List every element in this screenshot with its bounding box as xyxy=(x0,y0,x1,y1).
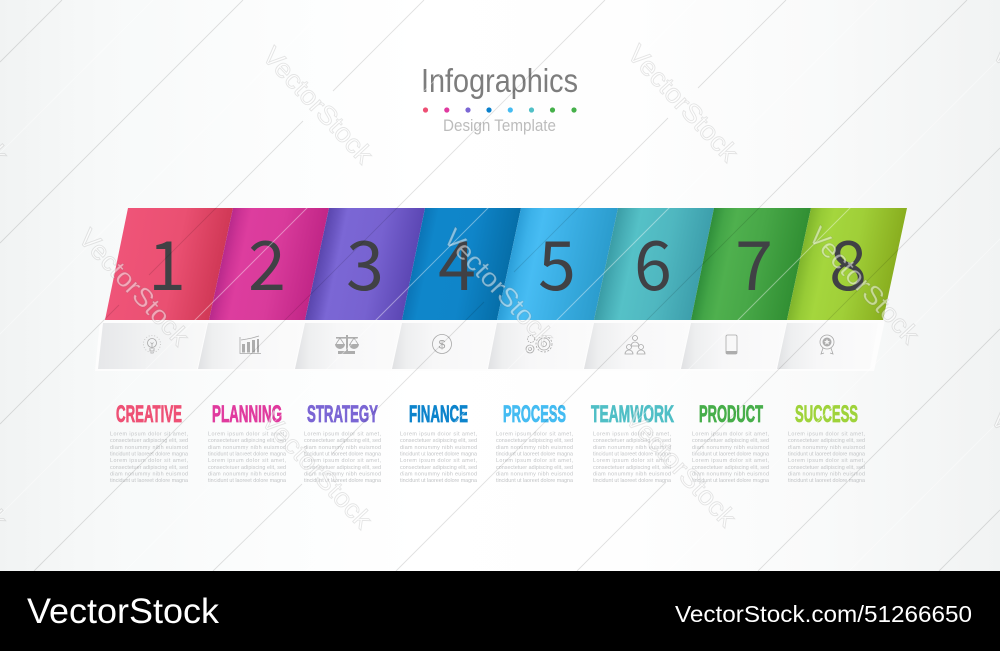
body text: Lorem ipsum dolor sit amet, xyxy=(208,458,286,464)
body text: tincidunt ut laoreet dolore magna xyxy=(593,452,671,458)
band numbers: 8 xyxy=(829,211,867,310)
band 2 xyxy=(209,208,329,320)
coloured dots row xyxy=(423,107,577,113)
icon: light bulb xyxy=(144,336,160,353)
numbered colour bands xyxy=(105,208,907,320)
band numbers xyxy=(148,211,867,310)
watermarks: VectorStock xyxy=(73,223,196,352)
body text: diam nonummy nibh euismod xyxy=(400,445,477,451)
body text: tincidunt ut laoreet dolore magna xyxy=(304,452,381,458)
body text: consectetuer adipiscing elit, sed xyxy=(788,465,865,471)
body text: tincidunt ut laoreet dolore magna xyxy=(496,452,573,458)
body text: tincidunt ut laoreet dolore magna xyxy=(496,478,573,484)
band 5 xyxy=(497,208,618,320)
body text: consectetuer adipiscing elit, sed xyxy=(208,465,286,471)
body text: consectetuer adipiscing elit, sed xyxy=(304,465,381,471)
body text: tincidunt ut laoreet dolore magna xyxy=(208,452,286,458)
body text: Lorem ipsum dolor sit amet, xyxy=(593,458,672,464)
title: Infographics xyxy=(421,62,578,99)
body text: diam nonummy nibh euismod xyxy=(208,445,286,451)
icon: dollar coin: $ xyxy=(439,338,446,352)
tile 4 xyxy=(392,323,496,369)
body text: consectetuer adipiscing elit, sed xyxy=(496,438,573,444)
tile 8 xyxy=(777,323,878,369)
tile 3 xyxy=(295,323,401,369)
body text: Lorem ipsum dolor sit amet, xyxy=(110,432,188,438)
band numbers: 4 xyxy=(438,211,476,310)
subtitle: Design Template xyxy=(443,116,556,135)
body text: diam nonummy nibh euismod xyxy=(593,445,671,451)
watermarks xyxy=(0,39,1000,535)
body text: tincidunt ut laoreet dolore magna xyxy=(208,478,286,484)
icon: scales xyxy=(335,335,359,354)
column: strategy xyxy=(304,401,382,484)
body text: consectetuer adipiscing elit, sed xyxy=(593,465,671,471)
band numbers: 1 xyxy=(148,211,186,310)
body text xyxy=(110,432,188,484)
column: teamwork xyxy=(591,401,674,484)
icon: smartphone xyxy=(726,335,737,354)
tile 5 xyxy=(488,323,593,369)
band 6 xyxy=(594,208,714,320)
body text: tincidunt ut laoreet dolore magna xyxy=(304,478,381,484)
body text: Lorem ipsum dolor sit amet, xyxy=(208,432,286,438)
body text: consectetuer adipiscing elit, sed xyxy=(400,438,477,444)
body text: diam nonummy nibh euismod xyxy=(208,472,286,478)
band 3 xyxy=(305,208,425,320)
heading: PROCESS xyxy=(503,401,566,428)
icon: award badge xyxy=(820,335,834,354)
watermarks: VectorStock xyxy=(256,406,379,535)
icon tiles row xyxy=(95,320,885,371)
body text: tincidunt ut laoreet dolore magna xyxy=(788,478,865,484)
body text: diam nonummy nibh euismod xyxy=(692,445,769,451)
body text: diam nonummy nibh euismod xyxy=(110,445,188,451)
body text xyxy=(208,432,286,484)
body text: tincidunt ut laoreet dolore magna xyxy=(788,452,865,458)
body text: consectetuer adipiscing elit, sed xyxy=(692,465,769,471)
body text xyxy=(400,432,478,484)
heading: PLANNING xyxy=(212,401,282,428)
tile 2 xyxy=(198,323,304,369)
watermarks: VectorStock xyxy=(438,223,561,352)
body text: diam nonummy nibh euismod xyxy=(496,445,573,451)
band numbers: 7 xyxy=(735,211,773,310)
band numbers: 5 xyxy=(538,211,576,310)
body text xyxy=(304,432,382,484)
footer logo text: VectorStock xyxy=(27,592,220,631)
band 4 xyxy=(402,208,521,320)
column: planning xyxy=(208,401,286,484)
body text: consectetuer adipiscing elit, sed xyxy=(788,438,865,444)
body text: diam nonummy nibh euismod xyxy=(496,472,573,478)
band numbers: 2 xyxy=(248,211,286,310)
body text: diam nonummy nibh euismod xyxy=(692,472,769,478)
body text: consectetuer adipiscing elit, sed xyxy=(692,438,769,444)
body text: Lorem ipsum dolor sit amet, xyxy=(400,432,478,438)
heading: TEAMWORK xyxy=(591,401,674,428)
watermarks: VectorStock xyxy=(620,404,743,533)
band numbers: 3 xyxy=(346,211,384,310)
tile 6 xyxy=(584,323,690,369)
body text: Lorem ipsum dolor sit amet, xyxy=(110,458,188,464)
body text xyxy=(593,432,672,484)
body text: consectetuer adipiscing elit, sed xyxy=(110,438,188,444)
body text: Lorem ipsum dolor sit amet, xyxy=(692,458,770,464)
heading: SUCCESS xyxy=(795,401,858,428)
body text: Lorem ipsum dolor sit amet, xyxy=(788,432,866,438)
icon: dollar coin xyxy=(432,334,452,354)
body text xyxy=(692,432,770,484)
column: success xyxy=(788,401,866,484)
body text: consectetuer adipiscing elit, sed xyxy=(593,438,671,444)
icon: gears xyxy=(526,336,552,353)
heading: STRATEGY xyxy=(307,401,378,428)
tile 7 xyxy=(681,323,786,369)
body text: diam nonummy nibh euismod xyxy=(304,472,381,478)
heading: CREATIVE xyxy=(116,401,182,428)
body text: consectetuer adipiscing elit, sed xyxy=(304,438,381,444)
footer image id: VectorStock.com/51266650 xyxy=(675,601,972,627)
body text xyxy=(788,432,866,484)
body text: tincidunt ut laoreet dolore magna xyxy=(593,478,671,484)
body text: Lorem ipsum dolor sit amet, xyxy=(692,432,770,438)
body text xyxy=(496,432,574,484)
tile 1 xyxy=(98,323,207,369)
watermarks: VectorStock xyxy=(803,221,926,350)
body text: consectetuer adipiscing elit, sed xyxy=(208,438,286,444)
title block xyxy=(421,62,578,135)
column: product xyxy=(692,401,770,484)
heading: FINANCE xyxy=(409,401,468,428)
body text: Lorem ipsum dolor sit amet, xyxy=(593,432,672,438)
watermarks: VectorStock xyxy=(622,39,745,168)
body text: diam nonummy nibh euismod xyxy=(788,472,865,478)
column: process xyxy=(496,401,574,484)
band 7 xyxy=(691,208,811,320)
body text: Lorem ipsum dolor sit amet, xyxy=(304,432,382,438)
band 1 xyxy=(105,208,233,320)
watermarks: VectorStock xyxy=(257,41,380,170)
column: creative xyxy=(110,401,188,484)
body text: diam nonummy nibh euismod xyxy=(593,472,671,478)
body text: Lorem ipsum dolor sit amet, xyxy=(496,432,574,438)
icon: team xyxy=(625,336,645,354)
body text: diam nonummy nibh euismod xyxy=(788,445,865,451)
body text: tincidunt ut laoreet dolore magna xyxy=(692,452,769,458)
icons row xyxy=(144,334,834,354)
body text: consectetuer adipiscing elit, sed xyxy=(496,465,573,471)
body text: tincidunt ut laoreet dolore magna xyxy=(110,452,188,458)
body text: consectetuer adipiscing elit, sed xyxy=(400,465,477,471)
body text: diam nonummy nibh euismod xyxy=(110,472,188,478)
body text: Lorem ipsum dolor sit amet, xyxy=(304,458,382,464)
body text: tincidunt ut laoreet dolore magna xyxy=(400,452,477,458)
band 8 xyxy=(787,208,907,320)
icon: bar chart xyxy=(240,336,261,354)
body text: Lorem ipsum dolor sit amet, xyxy=(496,458,574,464)
body text: tincidunt ut laoreet dolore magna xyxy=(692,478,769,484)
body text: tincidunt ut laoreet dolore magna xyxy=(110,478,188,484)
body text: Lorem ipsum dolor sit amet, xyxy=(400,458,478,464)
body text: diam nonummy nibh euismod xyxy=(304,445,381,451)
footer bar xyxy=(0,571,1000,651)
body text: tincidunt ut laoreet dolore magna xyxy=(400,478,477,484)
body text: Lorem ipsum dolor sit amet, xyxy=(788,458,866,464)
body text: diam nonummy nibh euismod xyxy=(400,472,477,478)
column: finance xyxy=(400,401,478,484)
heading: PRODUCT xyxy=(699,401,763,428)
band numbers: 6 xyxy=(634,211,672,310)
body text: consectetuer adipiscing elit, sed xyxy=(110,465,188,471)
